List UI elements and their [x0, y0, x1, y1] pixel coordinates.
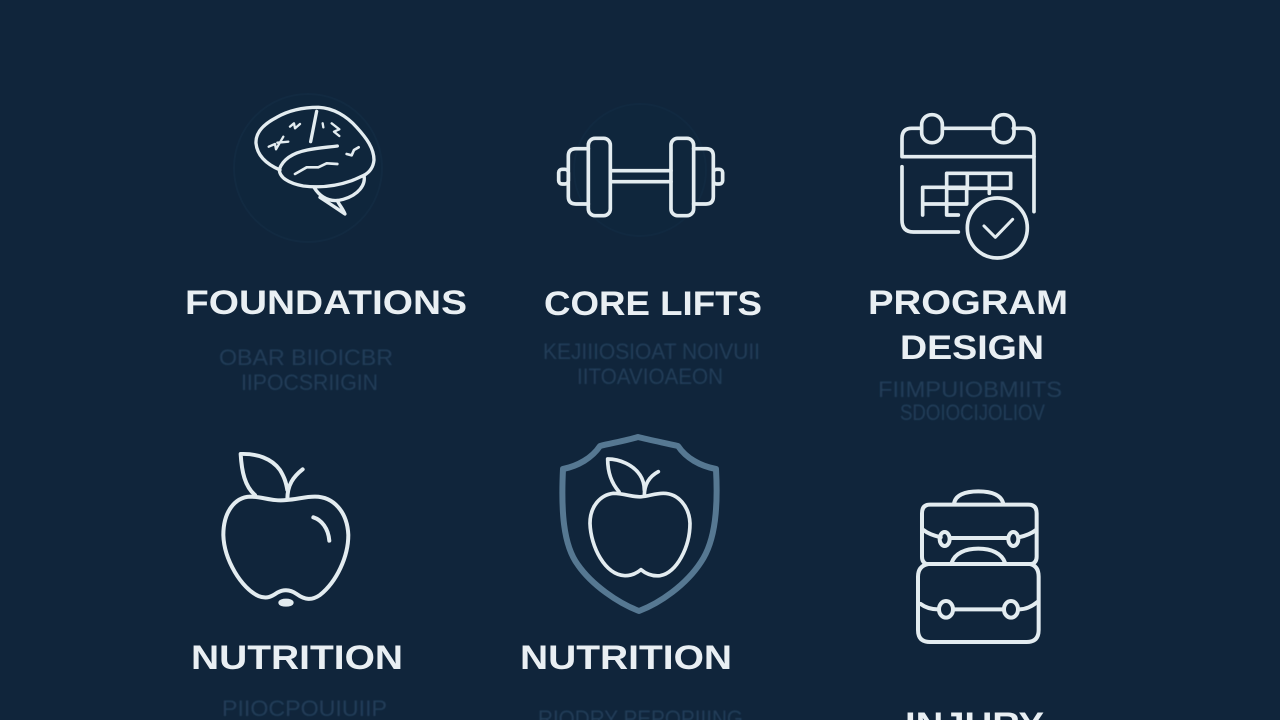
heading: core lifts: CORE LIFTS [544, 285, 762, 323]
heading: foundations: FOUNDATIONS [185, 284, 467, 322]
icon: apple [223, 454, 348, 605]
description: foundations [219, 345, 393, 395]
heading: nutrition second: NUTRITION [520, 639, 732, 677]
icon: stacked briefcases [918, 491, 1039, 642]
icon: brain [256, 107, 374, 214]
heading: program design: PROGRAM [868, 284, 1068, 322]
panel: injury [905, 491, 1044, 720]
description: foundations: IIPOCSRIIGIN [241, 370, 378, 395]
description: core lifts: KEJIIIOSIOAT NOIVUII [543, 339, 760, 364]
heading: nutrition: NUTRITION [191, 639, 403, 677]
panel: program design [868, 115, 1068, 425]
icon: shield [562, 437, 717, 611]
heading line: design: DESIGN [900, 329, 1044, 367]
panel: nutrition [191, 454, 403, 720]
icon: apple in shield [590, 459, 690, 576]
description: program design: FIIMPUIOBMIITS [878, 377, 1062, 402]
panel: nutrition with shield [520, 437, 743, 720]
description: core lifts: IITOAVIOAEON [577, 364, 723, 389]
description: program design [878, 377, 1062, 425]
icon: dumbbell [559, 138, 723, 216]
description: foundations: OBAR BIIOICBR [219, 345, 393, 370]
description: program design: SDOIOCIJOLIOV [900, 400, 1045, 425]
panel: core lifts [543, 104, 762, 389]
panel: foundations [185, 94, 467, 395]
icon: calendar with check [902, 115, 1034, 258]
description: core lifts [543, 339, 760, 389]
